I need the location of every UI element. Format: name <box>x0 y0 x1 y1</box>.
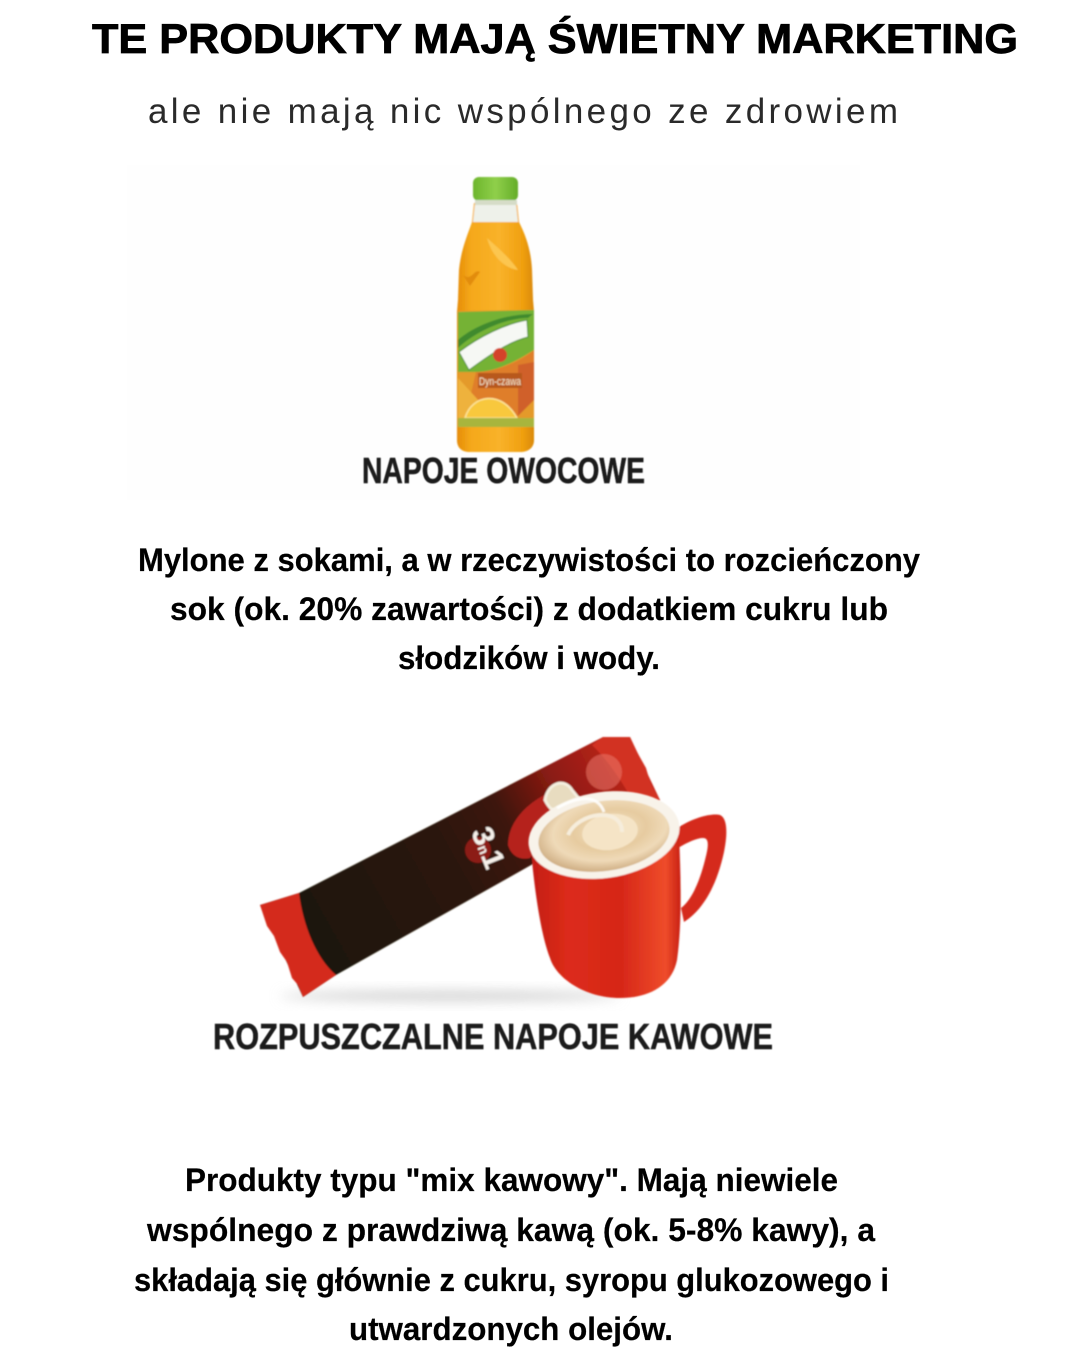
shadow under product <box>280 991 620 1001</box>
label: fruit drinks: NAPOJE OWOCOWE <box>362 450 645 491</box>
subtitle: ale nie mają nic wspólnego ze zdrowiem <box>148 92 898 131</box>
title: TE PRODUKTY MAJĄ ŚWIETNY MARKETING <box>92 14 1018 62</box>
icon: coffee sachet <box>260 737 660 997</box>
text block: coffee mix description: utwardzonych olejów. <box>349 1311 673 1347</box>
label: instant coffee drinks: ROZPUSZCZALNE NAPOJE KAWOWE <box>213 1016 773 1057</box>
sachet logo: 3n1 <box>465 822 511 874</box>
icon: red coffee mug <box>523 782 726 998</box>
image panel: fruit drink <box>127 165 860 500</box>
text block: coffee mix description: wspólnego z prawdziwą kawą (ok. 5-8% kawy), a <box>146 1212 875 1248</box>
image panel: instant coffee <box>213 737 773 1057</box>
icon: juice bottle <box>457 177 534 452</box>
text block: coffee mix description: Produkty typu "mix kawowy". Mają niewiele <box>185 1162 838 1198</box>
drink brand on label: Dyn-czawa <box>479 376 522 388</box>
text block: fruit drinks description: słodzików i wody. <box>398 640 660 676</box>
text block: fruit drinks description: Mylone z sokami, a w rzeczywistości to rozcieńczony <box>138 542 920 578</box>
text block: fruit drinks description: sok (ok. 20% zawartości) z dodatkiem cukru lub <box>170 591 888 627</box>
text block: coffee mix description <box>134 1162 889 1347</box>
text block: fruit drinks description <box>138 542 920 676</box>
text block: coffee mix description: składają się głównie z cukru, syropu glukozowego i <box>134 1262 889 1298</box>
